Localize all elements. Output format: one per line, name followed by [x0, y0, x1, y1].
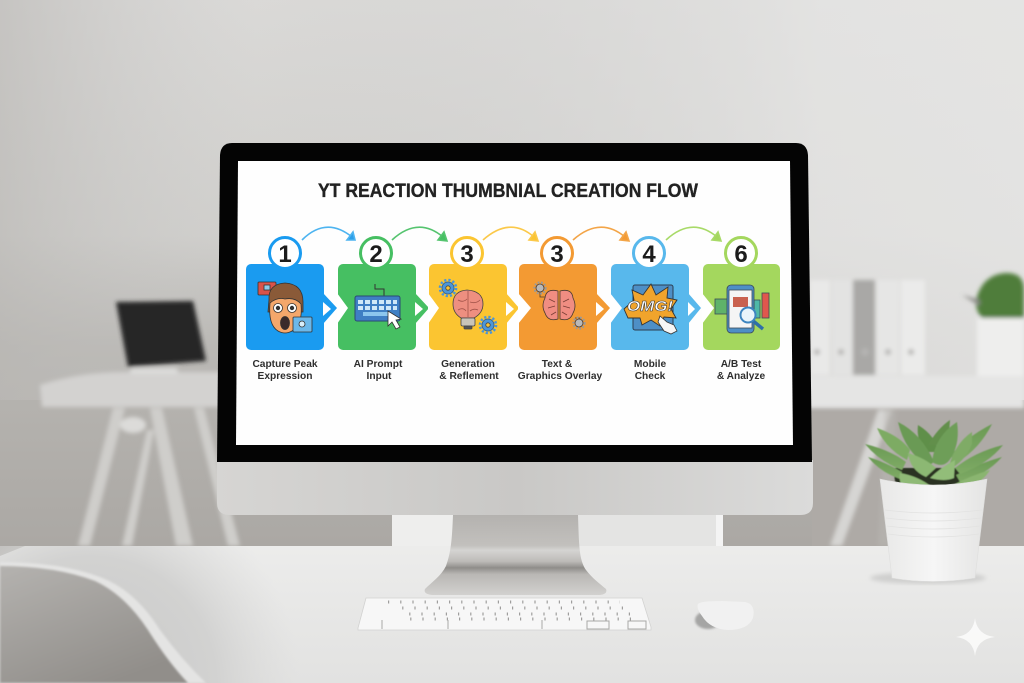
sparkle watermark [956, 618, 995, 656]
monitor stand [425, 515, 606, 595]
icon: shocked face [258, 282, 312, 333]
number badge 2: 2 [369, 241, 383, 268]
label 5: Check [635, 371, 666, 382]
card 4 [518, 264, 610, 350]
label 6: A/B Test [721, 359, 762, 370]
arrow: step 4 to 5 [573, 227, 629, 241]
label 5: Mobile [634, 359, 666, 370]
title: YT REACTION THUMBNIAL CREATION FLOW [318, 180, 699, 202]
succulent leaves [865, 420, 1003, 487]
step 3: generation and refinement [428, 238, 519, 382]
label 2: AI Prompt [354, 359, 403, 370]
monitor chin [217, 460, 813, 515]
pot [880, 479, 987, 582]
card 1 [246, 264, 337, 350]
card 6 [702, 264, 780, 350]
icon: keyboard and cursor [355, 284, 401, 329]
blurred back desk right with binders and plant [805, 273, 1024, 546]
label 1: Capture Peak [252, 359, 318, 370]
number badge 2 [360, 238, 392, 268]
keyboard [358, 598, 651, 630]
icon: brain bulb and gears [440, 280, 496, 333]
office chair [0, 562, 206, 683]
card 3 [428, 264, 519, 350]
number badge 3: 3 [460, 241, 474, 268]
step 2: AI prompt input [337, 238, 429, 382]
number badge 5: 4 [642, 241, 656, 268]
card 5 [610, 264, 701, 350]
number badge 1 [270, 238, 300, 268]
step 5: mobile check [610, 238, 701, 382]
label 6: & Analyze [717, 371, 765, 382]
number badge 3 [452, 238, 482, 268]
icon: tablet with OMG burst: OMG! [627, 299, 673, 315]
monitor screen [236, 161, 793, 445]
arrow: step 3 to 4 [483, 227, 538, 241]
arrow: step 2 to 3 [392, 227, 447, 241]
number badge 6: 6 [734, 241, 748, 268]
arrow: step 1 to 2 [302, 227, 355, 240]
label 4: Graphics Overlay [518, 371, 603, 382]
succulent plant in pot [865, 420, 1003, 584]
label 3: & Reflement [439, 371, 499, 382]
monitor [217, 143, 813, 515]
arrow: step 5 to 6 [666, 227, 721, 241]
label 2: Input [367, 371, 392, 382]
card 2 [337, 264, 429, 350]
monitor bezel [217, 143, 812, 462]
number badge 5 [634, 238, 664, 268]
icon: brain and gears [534, 282, 585, 329]
label 1: Expression [258, 371, 312, 382]
number badge 6 [726, 238, 756, 268]
mouse [695, 601, 754, 630]
number badge 4: 3 [550, 241, 564, 268]
step 6: A/B test and analyze [702, 238, 780, 382]
main desk [0, 546, 1024, 683]
icon: phone, charts and magnifier [715, 285, 769, 333]
number badge 1: 1 [278, 241, 292, 268]
step 4: text and graphics overlay [518, 238, 610, 382]
blurred back desk left with laptop [40, 301, 240, 546]
icon: tablet with OMG burst [624, 284, 677, 334]
label 4: Text & [542, 359, 573, 370]
label 3: Generation [441, 359, 495, 370]
wall strips behind monitor [392, 515, 723, 546]
number badge 4 [542, 238, 572, 268]
step 1: capture peak expression [246, 238, 337, 382]
